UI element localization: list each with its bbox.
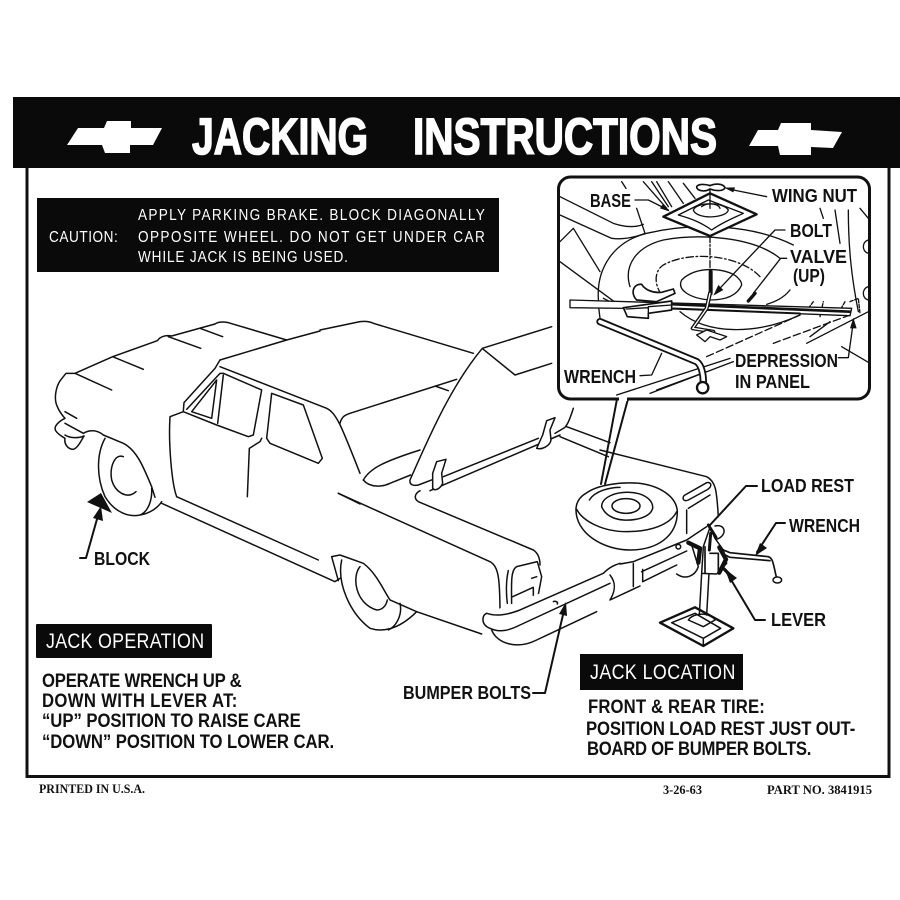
wrench tool	[600, 322, 703, 382]
jack location text	[586, 696, 855, 759]
label: bumper bolts: BUMPER BOLTS	[403, 683, 531, 703]
panel lines	[707, 315, 850, 357]
jack base	[660, 607, 733, 646]
bumper	[610, 527, 707, 600]
inset labels: BOLT	[790, 221, 832, 241]
valve leader	[753, 258, 787, 293]
tail light	[506, 562, 542, 610]
bumper bolts arrow	[559, 602, 567, 616]
inset labels: WING NUT	[772, 186, 857, 206]
jack operation text: OPERATE WRENCH UP &	[42, 670, 242, 691]
wrench leader	[640, 353, 662, 376]
trunk opening	[415, 427, 610, 565]
bolt leader	[717, 230, 785, 292]
label: lever: LEVER	[771, 610, 826, 630]
jack location heading: JACK LOCATION	[590, 661, 735, 684]
lever leader	[725, 569, 765, 620]
jack operation text: DOWN WITH LEVER AT:	[42, 690, 237, 711]
rear bumper	[483, 563, 620, 645]
icon: right bowtie	[749, 123, 842, 155]
icon: wheel block	[87, 493, 112, 513]
jack bar	[570, 300, 852, 316]
trunk lid	[410, 327, 573, 485]
caution text: APPLY PARKING BRAKE. BLOCK DIAGONALLY	[138, 207, 485, 224]
footer: part number: PART NO. 3841915	[767, 783, 872, 797]
caution text: OPPOSITE WHEEL. DO NOT GET UNDER CAR	[138, 229, 485, 246]
inset detail panel	[558, 177, 870, 401]
outer frame	[27, 168, 889, 776]
wrench leader	[755, 523, 785, 556]
label: load rest: LOAD REST	[761, 476, 854, 496]
jack location text: POSITION LOAD REST JUST OUT-	[586, 718, 855, 739]
caution label: CAUTION:	[49, 229, 118, 246]
caution text: WHILE JACK IS BEING USED.	[138, 249, 348, 266]
bumper bolts leader	[533, 606, 565, 693]
inset labels: IN PANEL	[735, 372, 810, 392]
inset labels: (UP)	[793, 266, 825, 286]
header band	[13, 97, 900, 168]
jack post	[699, 573, 709, 615]
jack clamp	[623, 301, 672, 318]
block arrow	[80, 506, 103, 558]
spare tire and jack	[576, 450, 782, 646]
inset line art	[560, 182, 868, 395]
car rear section	[320, 321, 620, 645]
load rest leader	[710, 486, 757, 525]
jack operation heading	[36, 624, 212, 658]
footer: date code: 3-26-63	[663, 783, 702, 797]
depression leader	[838, 322, 853, 358]
jack location heading	[580, 654, 743, 690]
car illustration	[55, 321, 782, 693]
inset labels: BASE	[590, 191, 631, 211]
tail lamp	[683, 483, 711, 533]
lever	[693, 293, 713, 332]
inset labels: DEPRESSION	[735, 351, 838, 371]
title: instructions: INSTRUCTIONS	[413, 108, 717, 165]
base leader	[635, 200, 668, 210]
label: wrench: WRENCH	[789, 516, 860, 536]
centre rod	[708, 236, 712, 272]
jack head	[702, 527, 727, 574]
base plate	[663, 193, 757, 236]
spare tire	[576, 483, 677, 550]
jack location text: FRONT & REAR TIRE:	[588, 696, 765, 717]
caution panel	[37, 198, 499, 272]
jack location text: BOARD OF BUMPER BOLTS.	[587, 738, 811, 759]
jack operation heading: JACK OPERATION	[46, 630, 204, 653]
wing nut	[697, 184, 725, 191]
car front section	[55, 322, 360, 582]
jack operation text: “DOWN” POSITION TO LOWER CAR.	[42, 731, 334, 752]
label: block: BLOCK	[94, 549, 150, 569]
spare well	[598, 227, 793, 319]
inset labels	[564, 186, 857, 392]
icon: left bowtie	[67, 121, 162, 153]
title: jacking: JACKING	[192, 108, 368, 165]
footer: printed in usa: PRINTED IN U.S.A.	[39, 782, 145, 796]
inset labels: VALVE	[790, 247, 847, 267]
jack operation text	[42, 670, 334, 752]
inset frame	[558, 177, 870, 399]
caution text	[138, 207, 485, 266]
jack operation text: “UP” POSITION TO RAISE CARE	[42, 710, 301, 731]
lid hinges	[433, 418, 555, 490]
callout gap in frame	[619, 396, 627, 401]
tire callout pointer	[601, 399, 628, 484]
inset labels: WRENCH	[564, 367, 636, 387]
lid support rod	[430, 435, 560, 491]
wing nut leader	[728, 189, 767, 197]
